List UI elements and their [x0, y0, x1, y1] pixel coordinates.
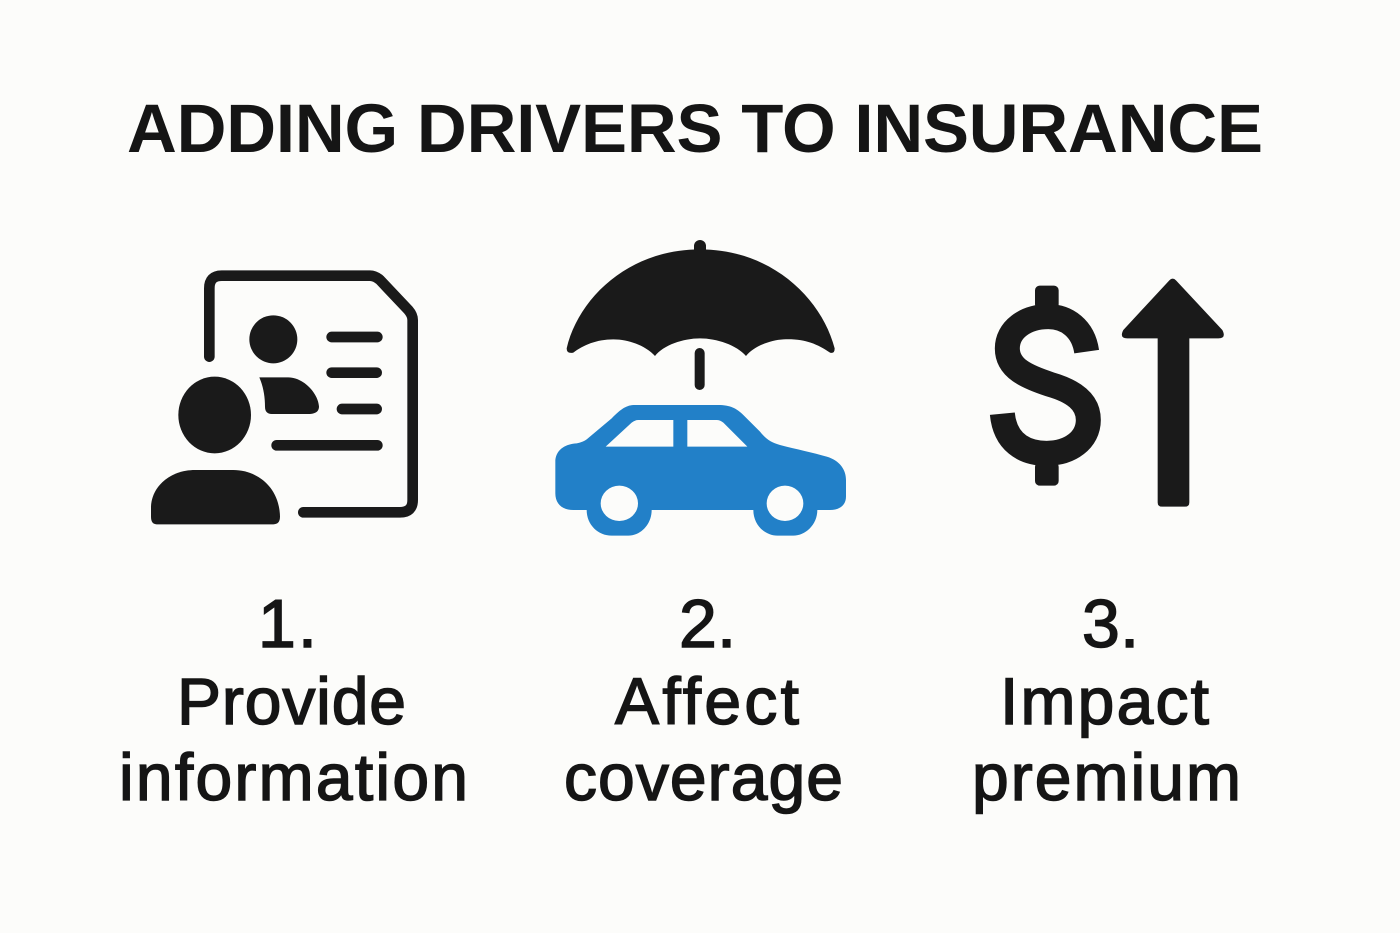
step 1 label [119, 586, 468, 814]
step 1 label: information [119, 740, 468, 814]
title: ADDING DRIVERS TO INSURANCE [127, 90, 1263, 167]
step 2 label: Affect [615, 664, 799, 738]
umbrella canopy [567, 240, 835, 356]
step 1 label: 1. [258, 586, 317, 662]
icon: driver information document [151, 276, 413, 524]
umbrella handle [685, 353, 715, 385]
step 2 label: 2. [679, 586, 736, 662]
icon: umbrella over car [555, 240, 846, 536]
car [555, 405, 846, 536]
step 3 label: premium [972, 740, 1241, 814]
step 3 label [972, 586, 1241, 814]
step 2 label: coverage [564, 740, 843, 814]
step 2 label [564, 586, 843, 814]
step 3 label: Impact [1000, 664, 1209, 738]
icon: dollar and up arrow [1002, 279, 1224, 507]
step 3 label: 3. [1082, 586, 1139, 662]
step 1 label: Provide [177, 664, 406, 738]
